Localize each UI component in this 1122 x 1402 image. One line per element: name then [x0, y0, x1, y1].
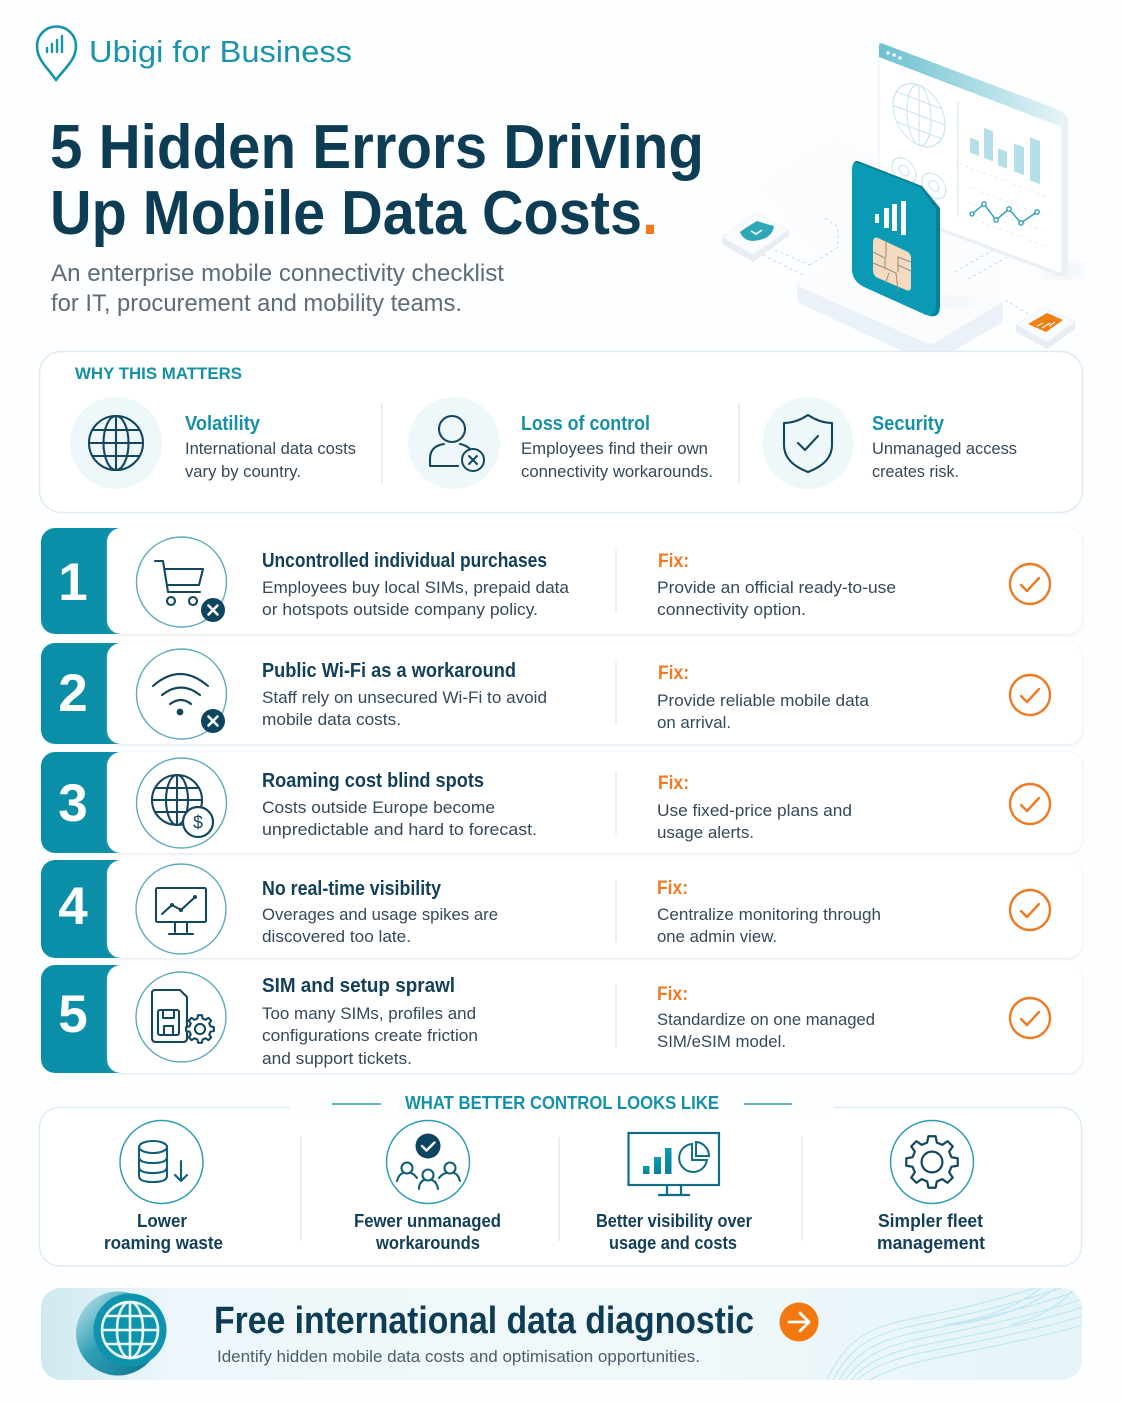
benefit: fewer unmanaged workarounds: Fewer unmanaged [354, 1211, 501, 1231]
benefit: better visibility: usage and costs [609, 1233, 737, 1253]
error row 1: Uncontrolled individual purchases [262, 550, 547, 572]
error row 3: usage alerts. [657, 823, 754, 842]
error row 2: Public Wi-Fi as a workaround [262, 660, 516, 682]
logo: Ubigi for Business: Ubigi for Business [89, 34, 352, 69]
error row 1: or hotspots outside company policy. [262, 600, 538, 619]
icon: globe with dollar: $ [193, 812, 203, 832]
icon: check [1010, 998, 1050, 1038]
item: loss of control: Loss of control [521, 413, 650, 435]
error row 1: 1 [58, 553, 88, 612]
error row 4: one admin view. [657, 927, 777, 946]
item: security: Unmanaged access [872, 439, 1017, 458]
error row 3: Use fixed-price plans and [657, 801, 852, 820]
title [50, 113, 704, 248]
benefit: lower roaming waste: Lower [137, 1211, 187, 1231]
title: Up Mobile Data Costs. [50, 179, 658, 248]
error row 5: and support tickets. [262, 1049, 412, 1068]
item: security: Security [872, 413, 945, 435]
error row 5: Too many SIMs, profiles and [262, 1004, 476, 1023]
item: loss of control: Employees find their own [521, 439, 708, 458]
SIM card [852, 161, 940, 316]
subtitle [51, 260, 504, 317]
error row 5: Fix: [657, 984, 688, 1005]
icon: globe [76, 1292, 166, 1376]
subtitle: for IT, procurement and mobility teams. [51, 290, 462, 317]
item: volatility: vary by country. [185, 462, 301, 481]
benefit: simpler fleet management [877, 1120, 985, 1253]
benefit: lower roaming waste: roaming waste [104, 1233, 223, 1253]
error row 5: Standardize on one managed [657, 1010, 875, 1029]
benefit: fewer unmanaged workarounds: workarounds [375, 1233, 480, 1253]
error row 5: configurations create friction [262, 1026, 478, 1045]
error row 5 [41, 965, 1082, 1073]
error row 5: SIM and setup sprawl [262, 975, 455, 997]
error row 3: Roaming cost blind spots [262, 770, 484, 792]
icon: check [1010, 890, 1050, 930]
error row 2: Fix: [658, 663, 689, 684]
dashboard window [879, 43, 1068, 277]
error row 1: connectivity option. [657, 600, 806, 619]
call to action banner: Free international data diagnostic [214, 1300, 754, 1342]
error row 1: Employees buy local SIMs, prepaid data [262, 578, 570, 597]
benefit: fewer unmanaged workarounds [354, 1120, 501, 1253]
error row 3: 3 [58, 774, 88, 833]
error row 3: Costs outside Europe become [262, 798, 495, 817]
error row 1: Provide an official ready-to-use [657, 578, 896, 597]
icon: wifi [136, 649, 226, 739]
icon: check [1010, 784, 1050, 824]
error row 3: unpredictable and hard to forecast. [262, 820, 537, 839]
benefit: simpler fleet management: management [877, 1233, 985, 1253]
error row 2: mobile data costs. [262, 710, 401, 729]
error row 4: Centralize monitoring through [657, 905, 881, 924]
tile: shield [722, 213, 789, 262]
error row 2: 2 [58, 664, 88, 723]
benefit: simpler fleet management: Simpler fleet [878, 1211, 983, 1231]
icon: monitor chart [136, 864, 226, 954]
error row 5: SIM/eSIM model. [657, 1032, 786, 1051]
error row 3 [41, 752, 1082, 853]
icon: cart [136, 537, 226, 627]
item: security: creates risk. [872, 462, 959, 481]
icon: SIM and gear [136, 972, 226, 1062]
tile: orange SIM [1016, 307, 1075, 349]
error row 2: Provide reliable mobile data [657, 691, 870, 710]
hero illustration: SIM card and dashboard [722, 43, 1084, 362]
item: volatility: Volatility [185, 413, 261, 435]
title: 5 Hidden Errors Driving [50, 113, 704, 182]
error row 2: on arrival. [657, 713, 731, 732]
error row 2 [41, 643, 1082, 744]
item: loss of control [408, 397, 713, 489]
benefit: better visibility: Better visibility over [596, 1211, 752, 1231]
error row 4: discovered too late. [262, 927, 411, 946]
heading: what better control looks like: WHAT BETTER CONTROL LOOKS LIKE [405, 1093, 719, 1113]
error row 4 [41, 860, 1082, 958]
item: security [762, 397, 1017, 489]
icon: globe with dollar [136, 758, 226, 848]
item: loss of control: connectivity workarounds. [521, 462, 713, 481]
error row 4: 4 [58, 877, 88, 936]
subtitle: An enterprise mobile connectivity checklist [51, 260, 504, 287]
error row 4: Fix: [657, 878, 688, 899]
platform [797, 283, 1003, 351]
error row 3: Fix: [658, 773, 689, 794]
benefit: lower roaming waste [104, 1120, 223, 1253]
error row 4: Overages and usage spikes are [262, 905, 498, 924]
error row 2: Staff rely on unsecured Wi-Fi to avoid [262, 688, 547, 707]
panel: what better control looks like [40, 1093, 1082, 1266]
benefit: better visibility [596, 1133, 752, 1253]
icon: check [1010, 564, 1050, 604]
panel: why this matters [40, 352, 1082, 512]
logo: Ubigi for Business [37, 27, 352, 80]
error row 4: No real-time visibility [262, 878, 442, 900]
error row 1 [41, 528, 1082, 634]
call to action banner [41, 1288, 1082, 1380]
heading: why this matters: WHY THIS MATTERS [75, 364, 242, 383]
item: volatility [70, 397, 356, 489]
error row 1: Fix: [658, 551, 689, 572]
arrow button [780, 1302, 818, 1342]
error row 5: 5 [58, 985, 88, 1044]
call to action banner: Identify hidden mobile data costs and optimisation opportunities. [217, 1347, 700, 1366]
icon: check [1010, 675, 1050, 715]
item: volatility: International data costs [185, 439, 356, 458]
